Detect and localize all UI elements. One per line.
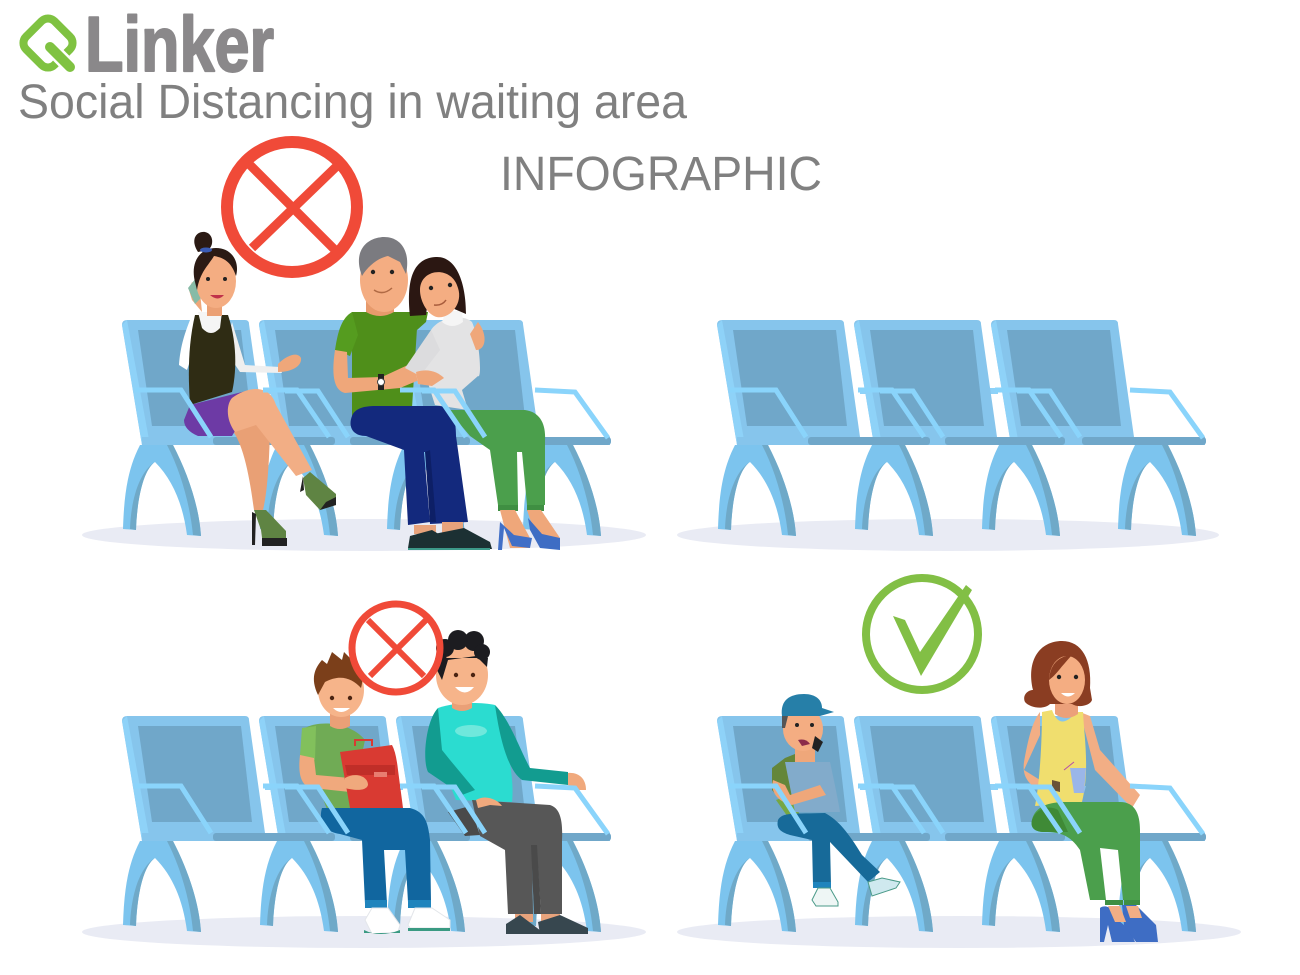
- title: Social Distancing in waiting area: [18, 76, 687, 129]
- bench: [717, 320, 1206, 536]
- icon: small red prohibition cross: [352, 604, 440, 692]
- floor shadow: [677, 916, 1241, 948]
- armrests: [730, 390, 1203, 438]
- icon: Q logo mark: [20, 15, 76, 71]
- person: woman with drink: [1024, 641, 1158, 942]
- logo: [20, 0, 274, 88]
- icon: red prohibition cross: [227, 142, 357, 272]
- person: boy with backpack: [299, 652, 450, 934]
- floor shadow: [82, 916, 646, 948]
- person: man in green shirt: [333, 237, 428, 420]
- floor shadow: [82, 519, 646, 551]
- person: boy on phone: [772, 694, 900, 906]
- floor shadow: [677, 519, 1219, 551]
- person: man in teal shirt: [425, 630, 588, 934]
- logo wordmark: Linker: [85, 0, 274, 88]
- front armrests: [135, 786, 608, 834]
- subtitle: INFOGRAPHIC: [500, 148, 822, 201]
- icon: green check mark in circle: [866, 578, 978, 690]
- bench: [122, 320, 611, 536]
- front armrests: [135, 390, 608, 438]
- person: woman on phone: [179, 232, 336, 546]
- man's navy trousers and shoes: [351, 406, 492, 550]
- bench: [122, 716, 611, 932]
- panel: crowded bench with three people: [82, 232, 646, 551]
- panel: people correctly distanced: [677, 641, 1241, 948]
- person: woman in white top: [405, 257, 560, 550]
- bench: [717, 716, 1206, 932]
- panel: empty bench: [677, 320, 1219, 551]
- front armrests: [730, 786, 1203, 834]
- panel: two men seated too close: [82, 630, 646, 948]
